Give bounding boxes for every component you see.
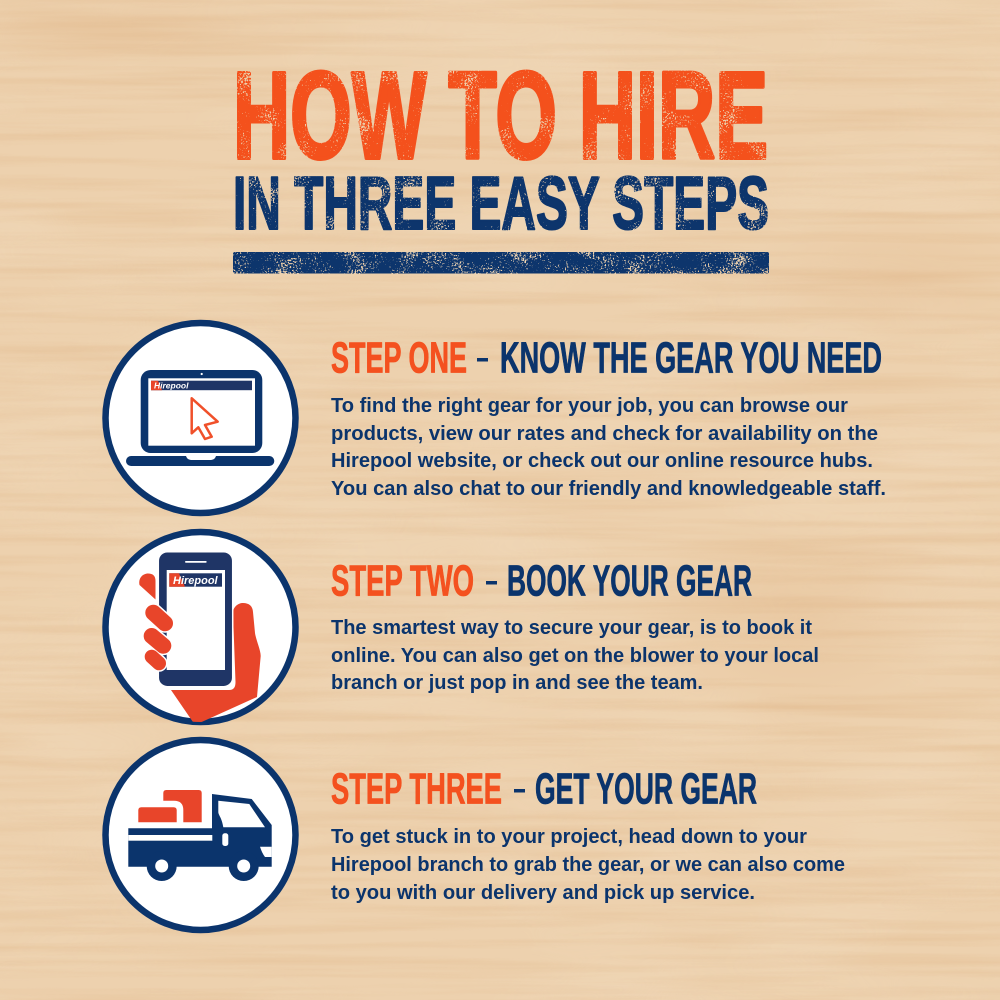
step three icon: delivery truck	[106, 740, 296, 930]
step three text: Hirepool branch to grab the gear, or we can also come	[331, 854, 845, 876]
truck body	[128, 794, 272, 867]
step one heading	[331, 334, 882, 382]
step one icon: laptop	[106, 323, 296, 513]
step two text: branch or just pop in and see the team.	[331, 672, 703, 694]
step two heading: STEP TWO	[331, 556, 474, 606]
step three text: To get stuck in to your project, head down to your	[331, 826, 807, 848]
distressed title bar	[233, 252, 769, 274]
step one text: products, view our rates and check for availability on the	[331, 423, 878, 445]
step one text: To find the right gear for your job, you can browse our	[331, 395, 848, 417]
back finger	[139, 574, 156, 600]
step three heading: STEP THREE	[331, 764, 502, 814]
phone	[158, 552, 233, 687]
step one text	[331, 395, 886, 500]
step two icon: phone in hand: Hirepool	[173, 575, 219, 587]
step two text: online. You can also get on the blower to your local	[331, 645, 819, 667]
step one text: Hirepool website, or check out our online resource hubs.	[331, 450, 873, 472]
hand	[171, 603, 261, 725]
step two text	[331, 617, 819, 694]
step one heading: STEP ONE	[331, 334, 467, 382]
step two text: The smartest way to secure your gear, is to book it	[331, 617, 812, 639]
step three text: to you with our delivery and pick up service.	[331, 882, 755, 904]
step two heading: BOOK YOUR GEAR	[507, 556, 752, 606]
step three heading	[331, 764, 757, 814]
step two icon: phone in hand	[106, 532, 296, 725]
title	[233, 48, 769, 245]
wheels	[147, 851, 177, 881]
step three text	[331, 826, 845, 904]
step two heading	[331, 556, 752, 606]
step one icon: laptop: Hirepool	[154, 380, 189, 390]
step three heading: GET YOUR GEAR	[535, 764, 757, 814]
step one text: You can also chat to our friendly and knowledgeable staff.	[331, 478, 886, 500]
gripping fingers	[152, 613, 165, 663]
cargo boxes	[138, 790, 202, 822]
